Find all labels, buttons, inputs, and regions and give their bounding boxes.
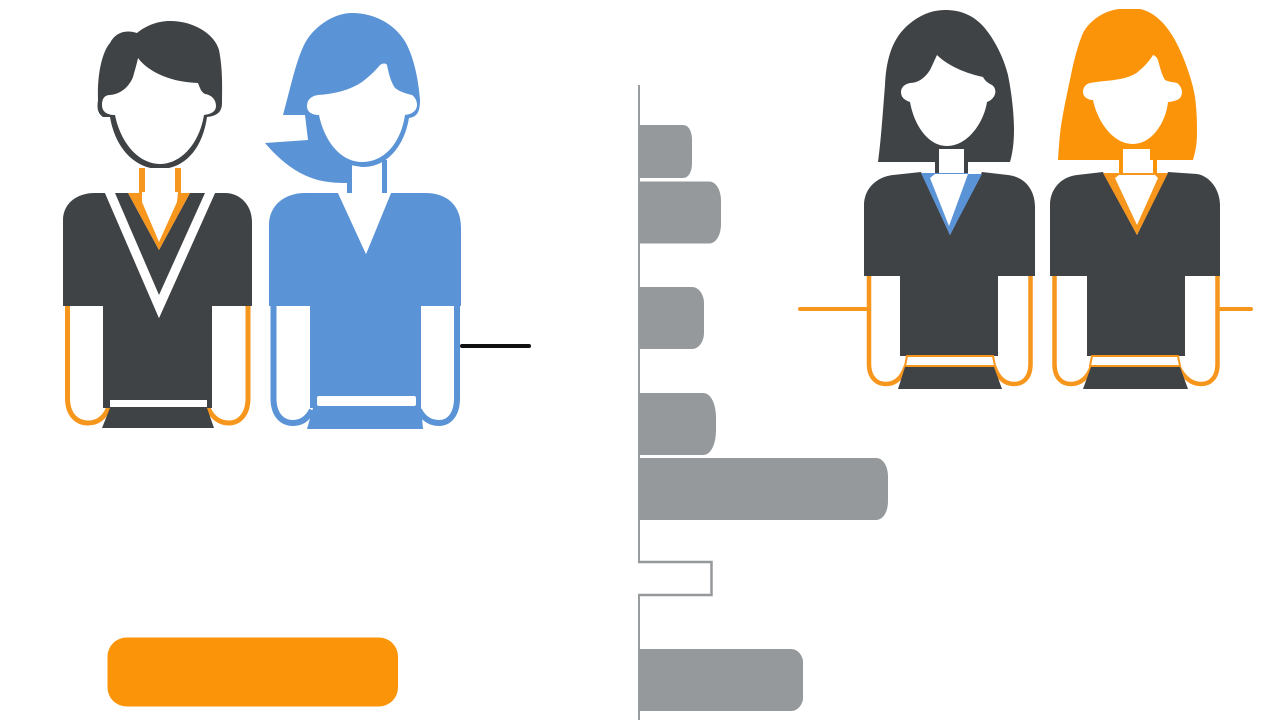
- bar 4: [639, 393, 716, 455]
- bar 6: outlined: [638, 562, 712, 595]
- chart axis: [638, 85, 640, 720]
- icon: woman with dark hair: [864, 10, 1035, 389]
- icon: woman in blue shirt: [265, 13, 461, 429]
- bar chart: [638, 85, 888, 720]
- icon: man in dark shirt: [63, 21, 252, 428]
- connector line: orange left: [798, 307, 868, 311]
- bar 2: [639, 182, 721, 244]
- connector line: orange right: [1218, 307, 1253, 311]
- bar 3: [639, 287, 704, 349]
- orange button: [108, 638, 398, 706]
- bar 5: [639, 458, 888, 520]
- connector line: black: [460, 344, 531, 348]
- bar 7: [639, 649, 803, 711]
- icon: woman with orange hair: [1050, 9, 1220, 389]
- bar 1: [639, 125, 692, 178]
